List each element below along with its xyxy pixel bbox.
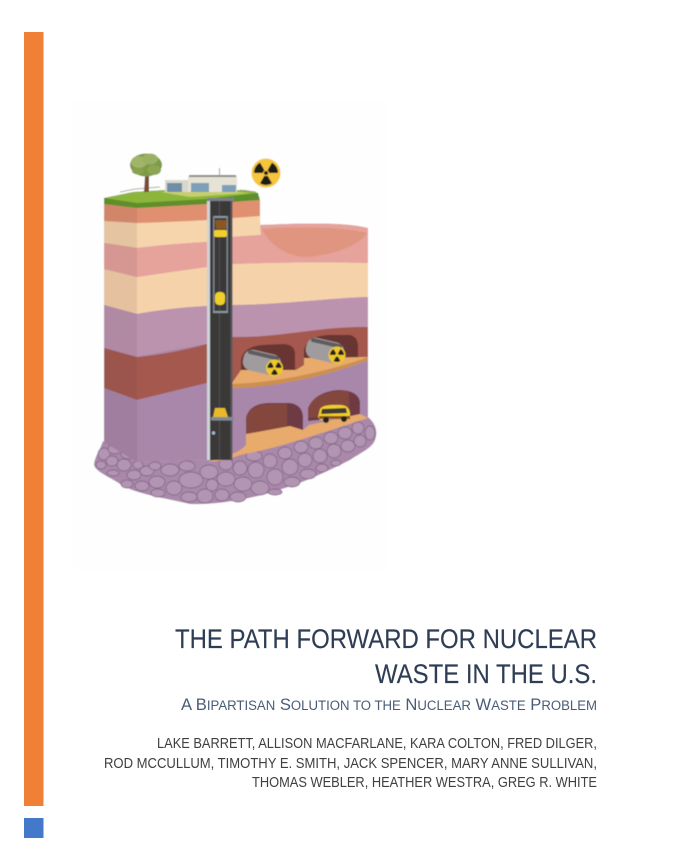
blue square xyxy=(24,818,44,838)
waste cask upper left xyxy=(241,348,283,377)
authors: THOMAS WEBLER, HEATHER WESTRA, GREG R. WHITE xyxy=(252,775,597,791)
rock foundation xyxy=(94,417,376,504)
authors xyxy=(104,736,597,791)
orange side bar xyxy=(24,32,44,806)
title: WASTE IN THE U.S. xyxy=(375,659,597,689)
grass and surface xyxy=(104,187,260,208)
left block strata front xyxy=(104,203,207,462)
subtitle: A BIPARTISAN SOLUTION TO THE NUCLEAR WASTE PROBLEM xyxy=(181,695,597,714)
lower tunnel level xyxy=(246,403,303,443)
illustration: underground nuclear waste repository xyxy=(72,100,388,570)
elevator shaft xyxy=(207,198,234,460)
title: THE PATH FORWARD FOR NUCLEAR xyxy=(175,624,597,654)
authors: LAKE BARRETT, ALLISON MACFARLANE, KARA COLTON, FRED DILGER, xyxy=(157,736,597,752)
title xyxy=(175,624,597,689)
waste cask upper right xyxy=(304,336,346,365)
transport vehicle xyxy=(318,405,350,423)
right block strata xyxy=(208,200,368,462)
icon: radiation sign xyxy=(252,158,280,188)
tree xyxy=(130,154,162,192)
upper tunnel level xyxy=(232,327,368,387)
authors: ROD MCCULLUM, TIMOTHY E. SMITH, JACK SPENCER, MARY ANNE SULLIVAN, xyxy=(104,756,597,772)
building xyxy=(165,168,237,192)
